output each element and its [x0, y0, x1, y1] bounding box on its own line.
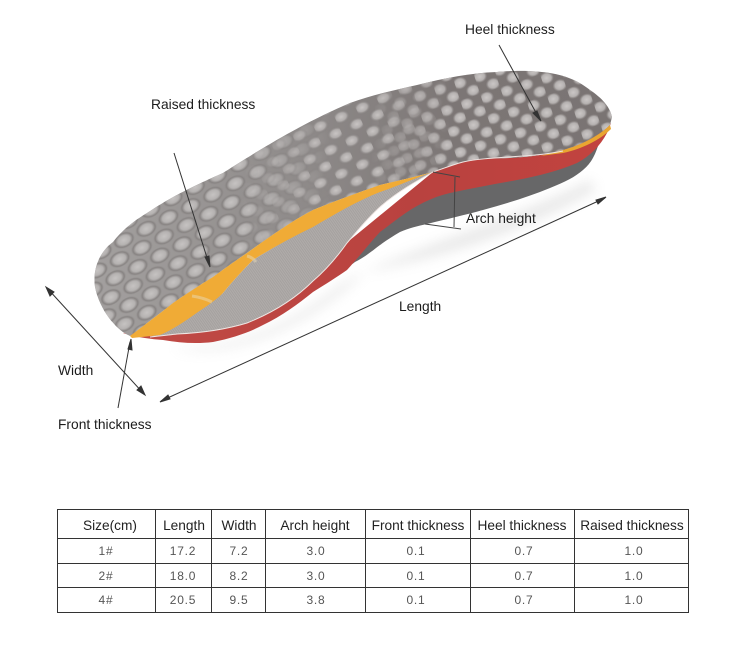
- table header: Front thickness: [372, 518, 465, 533]
- row 2#: [99, 569, 644, 583]
- heel thickness arrow: [499, 45, 541, 121]
- row 1#: 17.2: [170, 544, 196, 558]
- row 1#: 1#: [99, 544, 113, 558]
- row 4#: [99, 593, 644, 607]
- row 4#: 9.5: [229, 593, 249, 607]
- table header: [83, 518, 684, 533]
- row 4#: 1.0: [624, 593, 644, 607]
- annotation arrows: [46, 45, 606, 408]
- arch fabric: [150, 172, 433, 337]
- row 1#: 7.2: [229, 544, 249, 558]
- row 4#: 3.8: [306, 593, 326, 607]
- row 4#: 0.7: [514, 593, 534, 607]
- pale folds on yellow band: [192, 256, 256, 302]
- row 2#: 0.1: [406, 569, 426, 583]
- size table: [57, 509, 689, 613]
- table header: Width: [222, 518, 256, 533]
- row 1#: [99, 544, 644, 558]
- front thickness arrow: [118, 339, 132, 408]
- row 2#: 0.7: [514, 569, 534, 583]
- insole illustration: [94, 70, 612, 343]
- label: front thickness: Front thickness: [58, 417, 152, 432]
- row 4#: 20.5: [170, 593, 196, 607]
- row 4#: 0.1: [406, 593, 426, 607]
- row 2#: 2#: [99, 569, 113, 583]
- table header: Length: [163, 518, 205, 533]
- row 2#: 8.2: [229, 569, 249, 583]
- row 2#: 18.0: [170, 569, 196, 583]
- red mid layer: [123, 123, 611, 343]
- row 2#: 3.0: [306, 569, 326, 583]
- table header: Size(cm): [83, 518, 137, 533]
- row 1#: 0.1: [406, 544, 426, 558]
- label: raised thickness: Raised thickness: [151, 97, 255, 112]
- table header: Arch height: [280, 518, 350, 533]
- grey base layer: [333, 146, 598, 273]
- arch height bracket: [425, 172, 461, 229]
- width arrow: [46, 287, 145, 395]
- row 1#: 1.0: [624, 544, 644, 558]
- table header: Raised thickness: [580, 518, 684, 533]
- label: length: Length: [399, 299, 441, 314]
- yellow band: [130, 172, 433, 338]
- table header: Heel thickness: [477, 518, 567, 533]
- label: heel thickness: Heel thickness: [465, 22, 555, 37]
- label: arch height: Arch height: [466, 211, 536, 226]
- raised thickness arrow: [174, 153, 210, 267]
- length arrow: [160, 197, 606, 402]
- table grid: [57, 509, 689, 613]
- white edge: [150, 151, 563, 337]
- row 2#: 1.0: [624, 569, 644, 583]
- label: width: Width: [58, 363, 93, 378]
- row 1#: 0.7: [514, 544, 534, 558]
- floor shadow: [170, 180, 596, 351]
- row 1#: 3.0: [306, 544, 326, 558]
- top surface with dot texture: [94, 70, 612, 336]
- row 4#: 4#: [99, 593, 113, 607]
